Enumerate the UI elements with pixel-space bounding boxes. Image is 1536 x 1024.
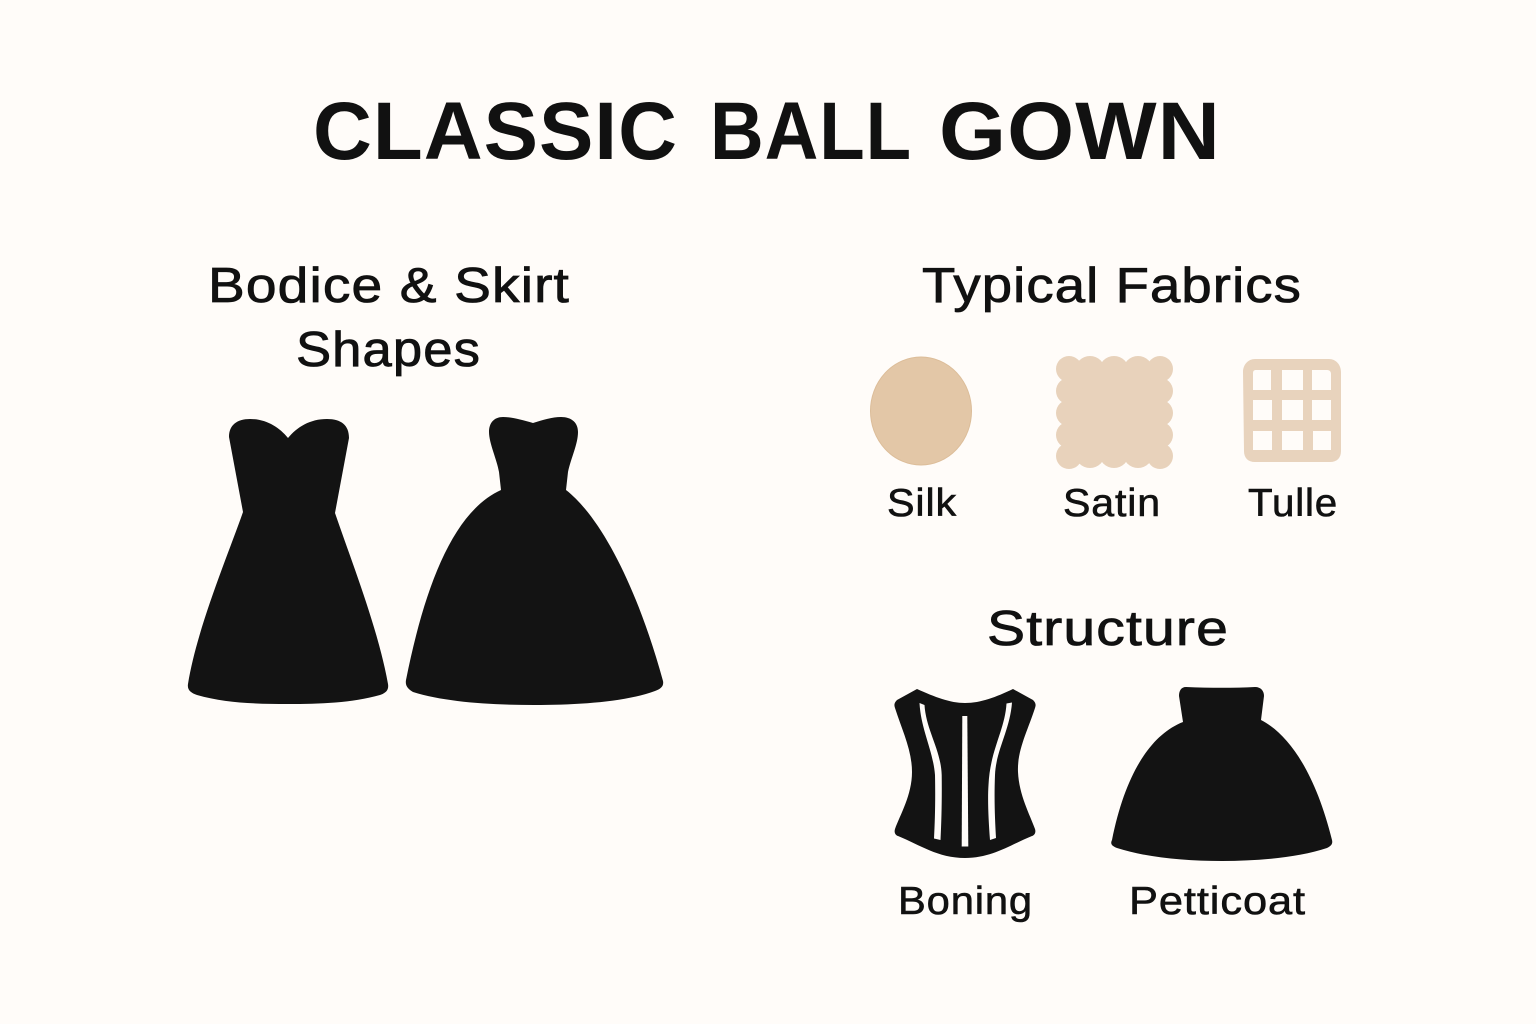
panel: typical fabrics <box>870 259 1341 525</box>
label: satin: Satin <box>1063 482 1161 525</box>
icon: full ball gown silhouette <box>406 417 663 705</box>
icon: tulle swatch <box>1243 359 1341 462</box>
title <box>313 86 1221 177</box>
label: tulle: Tulle <box>1248 482 1338 525</box>
label: boning: Boning <box>898 880 1033 923</box>
panel: bodice and skirt shapes <box>188 259 663 705</box>
label: silk: Silk <box>887 482 957 525</box>
icon: boning corset <box>894 689 1036 858</box>
heading: typical fabrics: Typical Fabrics <box>922 259 1302 313</box>
icon: silk swatch <box>870 357 972 465</box>
title: GOWN <box>939 86 1221 177</box>
title: BALL <box>710 86 912 177</box>
heading: structure: Structure <box>987 602 1229 656</box>
heading: bodice and skirt shapes: Bodice & Skirt <box>208 259 570 313</box>
label: petticoat: Petticoat <box>1129 880 1306 923</box>
heading: bodice and skirt shapes: Shapes <box>296 323 481 377</box>
title: CLASSIC <box>313 86 678 177</box>
icon: A-line dress silhouette <box>188 419 388 704</box>
heading: bodice and skirt shapes <box>208 259 570 377</box>
icon: petticoat <box>1111 687 1332 861</box>
icon: satin swatch <box>1056 356 1173 469</box>
panel: structure <box>894 602 1332 923</box>
